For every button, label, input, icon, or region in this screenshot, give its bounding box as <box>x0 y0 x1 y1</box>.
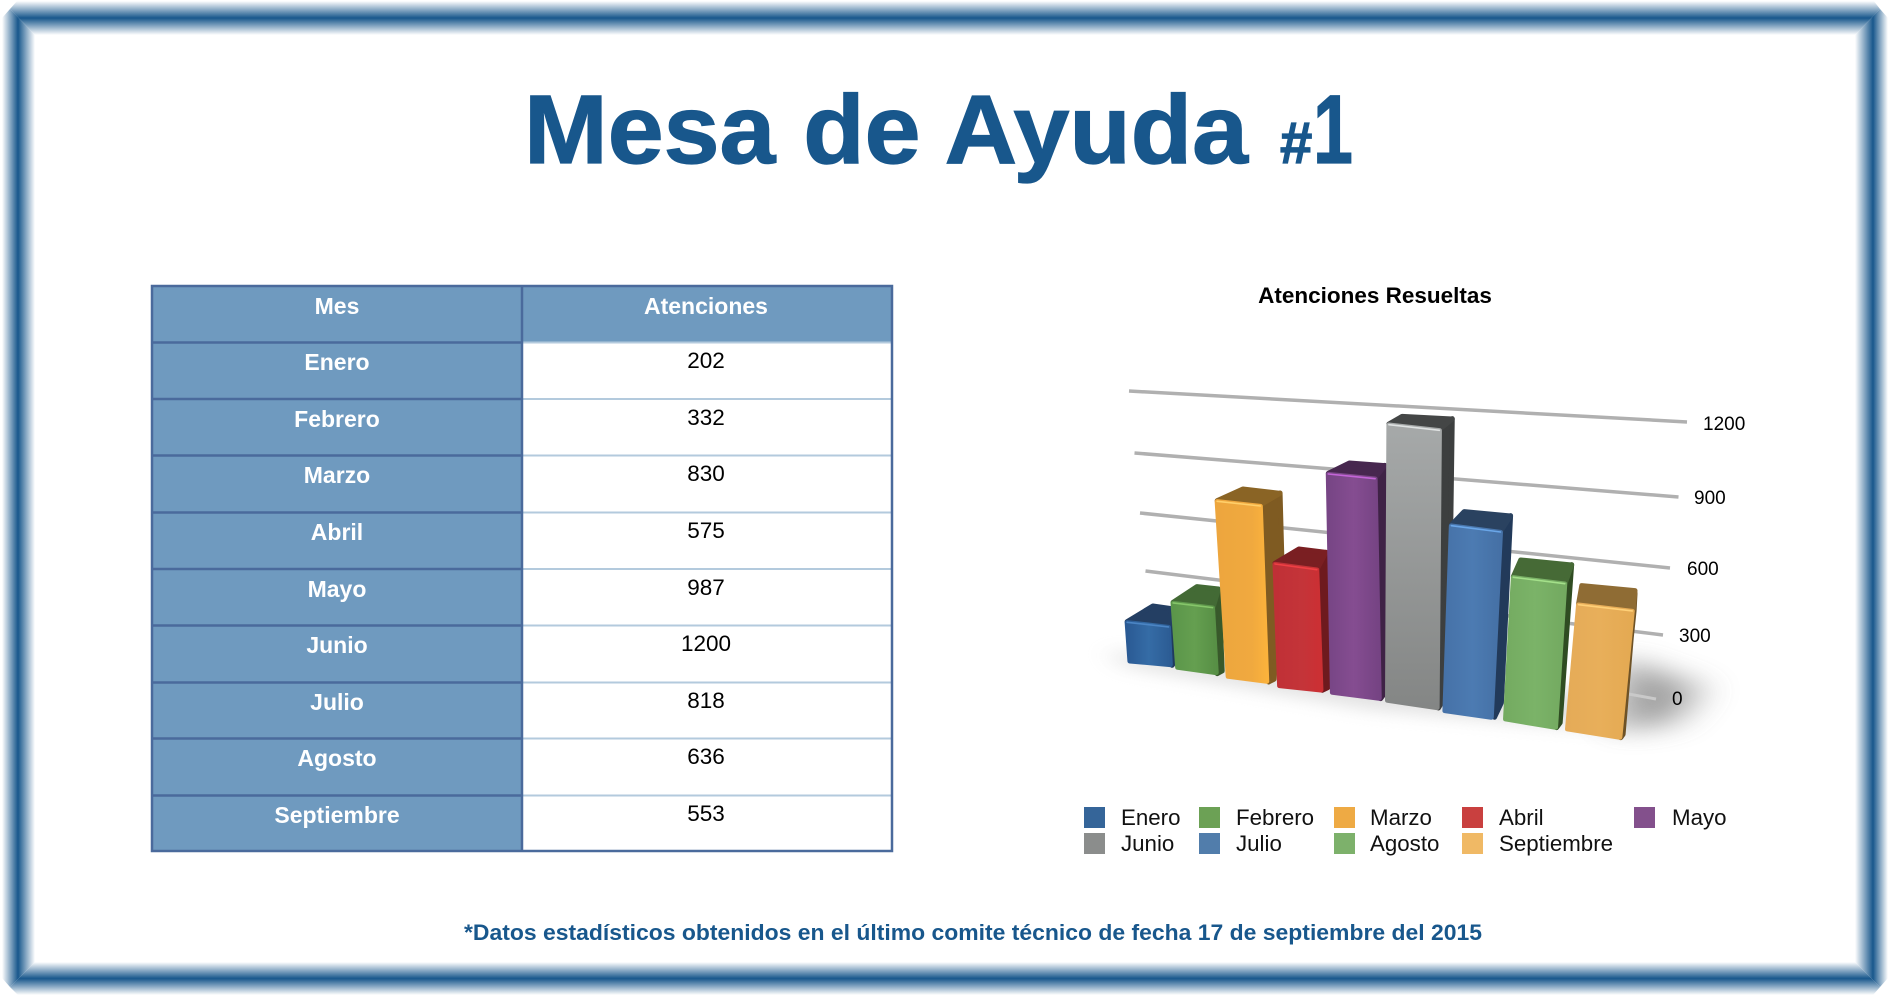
table rows: 830 <box>687 461 725 486</box>
title: Mesa de Ayuda <box>524 75 1249 184</box>
bar: Enero 202 <box>1127 606 1174 665</box>
table header <box>315 293 768 319</box>
table <box>152 286 892 851</box>
legend <box>1084 805 1727 856</box>
table rows: Agosto <box>297 745 377 771</box>
legend row 2: Junio <box>1121 831 1174 856</box>
table rows: 575 <box>687 518 725 543</box>
bar: Febrero 332 <box>1173 587 1222 674</box>
table rows: Julio <box>310 689 364 715</box>
legend row 1 <box>1084 805 1727 830</box>
table rows: Abril <box>311 519 363 545</box>
legend row 1: Abril <box>1499 805 1544 830</box>
bar: Julio 818 <box>1445 512 1511 717</box>
bar: Abril 575 <box>1275 549 1328 690</box>
axis labels <box>1672 414 1745 710</box>
footnote: *Datos estadísticos obtenidos en el último comite técnico de fecha 17 de septiembre del 2015 <box>464 920 1482 945</box>
legend row 1: Marzo <box>1370 805 1432 830</box>
table rows: 332 <box>687 405 725 430</box>
table rows <box>274 348 731 828</box>
table rows: Enero <box>304 349 370 375</box>
legend row 1: Febrero <box>1236 805 1314 830</box>
chart shadow <box>1110 650 1702 732</box>
table rows: 818 <box>687 688 725 713</box>
table rows: Septiembre <box>274 802 400 828</box>
legend row 2: Agosto <box>1370 831 1439 856</box>
legend row 2: Julio <box>1236 831 1282 856</box>
legend row 2: Septiembre <box>1499 831 1613 856</box>
bar: Junio 1200 <box>1388 416 1452 708</box>
axis labels: 600 <box>1687 559 1719 580</box>
table rows: 636 <box>687 744 725 769</box>
title: # <box>1280 111 1312 176</box>
legend row 1: Mayo <box>1672 805 1727 830</box>
table rows: Junio <box>306 632 368 658</box>
table rows: 987 <box>687 575 725 600</box>
table backgrounds and grid <box>152 286 892 851</box>
axis labels: 0 <box>1672 689 1683 710</box>
table header: Atenciones <box>644 293 768 319</box>
bar: Agosto 636 <box>1506 560 1572 728</box>
legend row 1: Enero <box>1121 805 1180 830</box>
axis labels: 1200 <box>1703 414 1745 435</box>
table rows: Marzo <box>304 462 370 488</box>
legend row 2 <box>1084 831 1613 856</box>
bar: Septiembre 553 <box>1568 586 1635 738</box>
axis labels: 900 <box>1694 488 1726 509</box>
table rows: 1200 <box>681 631 731 656</box>
table rows: Febrero <box>294 406 380 432</box>
title: 1 <box>1313 77 1353 185</box>
3D bar chart <box>1110 391 1745 738</box>
table rows: 202 <box>687 348 725 373</box>
axis labels: 300 <box>1679 626 1711 647</box>
table header: Mes <box>315 293 359 319</box>
bars <box>1127 416 1635 738</box>
table rows: 553 <box>687 801 725 826</box>
gridlines <box>1129 391 1687 699</box>
bar: Mayo 987 <box>1328 463 1385 699</box>
bar: Marzo 830 <box>1217 489 1282 682</box>
table rows: Mayo <box>308 576 366 602</box>
chart title: Atenciones Resueltas <box>1258 283 1492 308</box>
